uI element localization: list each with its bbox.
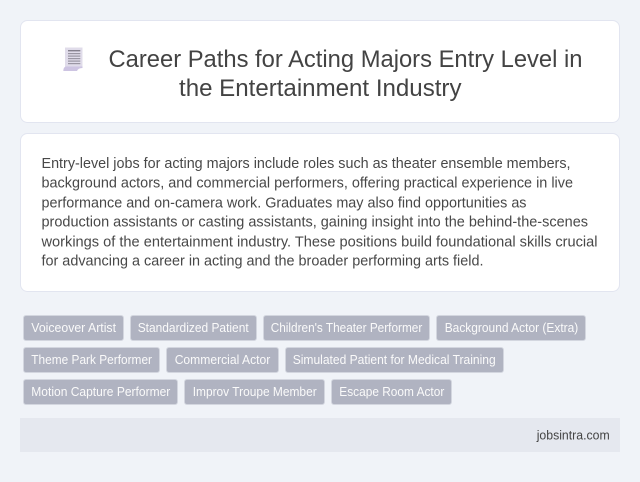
description panel	[20, 134, 620, 292]
tag: Commercial Actor	[166, 348, 278, 372]
tag: Improv Troupe Member	[184, 380, 324, 404]
tag: Theme Park Performer	[24, 348, 160, 372]
tag: Commercial Actor: Commercial Actor	[175, 353, 270, 367]
tag: Children's Theater Performer	[264, 316, 430, 340]
description text: for advancing a career in acting and the broader performing arts field.	[42, 254, 484, 270]
tag: Motion Capture Performer	[24, 380, 178, 404]
header panel	[20, 20, 620, 122]
tag: Motion Capture Performer: Motion Capture Performer	[31, 385, 170, 399]
description text: workings of the entertainment industry. These positions build foundational skills crucial	[41, 234, 597, 250]
title: the Entertainment Industry	[179, 75, 462, 102]
tag: Theme Park Performer: Theme Park Performer	[31, 353, 152, 367]
title	[108, 46, 582, 102]
footer source text: jobsintra.com	[536, 427, 610, 442]
tag: Children's Theater Performer: Children's Theater Performer	[271, 321, 422, 335]
tag: Background Actor (Extra): Background Actor (Extra)	[445, 321, 578, 335]
tag: Standardized Patient: Standardized Patient	[138, 321, 249, 335]
job tags	[24, 316, 586, 404]
tag: Standardized Patient	[130, 316, 256, 340]
tag: Simulated Patient for Medical Training: Simulated Patient for Medical Training	[293, 353, 496, 367]
description text	[41, 156, 597, 270]
tag: Improv Troupe Member: Improv Troupe Member	[193, 385, 317, 399]
description text: Entry-level jobs for acting majors include roles such as theater ensemble members,	[42, 156, 570, 172]
tag: Escape Room Actor	[332, 380, 452, 404]
tag: Voiceover Artist	[24, 316, 124, 340]
tag: Voiceover Artist: Voiceover Artist	[31, 321, 117, 335]
icon: paper scroll	[63, 48, 82, 71]
footer bar	[20, 418, 620, 452]
description text: background actors, and commercial performers, offering practical experience in live	[42, 176, 573, 192]
tag: Background Actor (Extra)	[436, 316, 586, 340]
description text: production assistants or casting assistants, gaining insight into the behind-the-scenes	[42, 214, 588, 230]
tag: Simulated Patient for Medical Training	[286, 348, 504, 372]
tag: Escape Room Actor: Escape Room Actor	[339, 385, 444, 399]
title: Career Paths for Acting Majors Entry Level in	[108, 46, 582, 73]
description text: performance and on-camera work. Graduates may also find opportunities as	[42, 196, 526, 212]
